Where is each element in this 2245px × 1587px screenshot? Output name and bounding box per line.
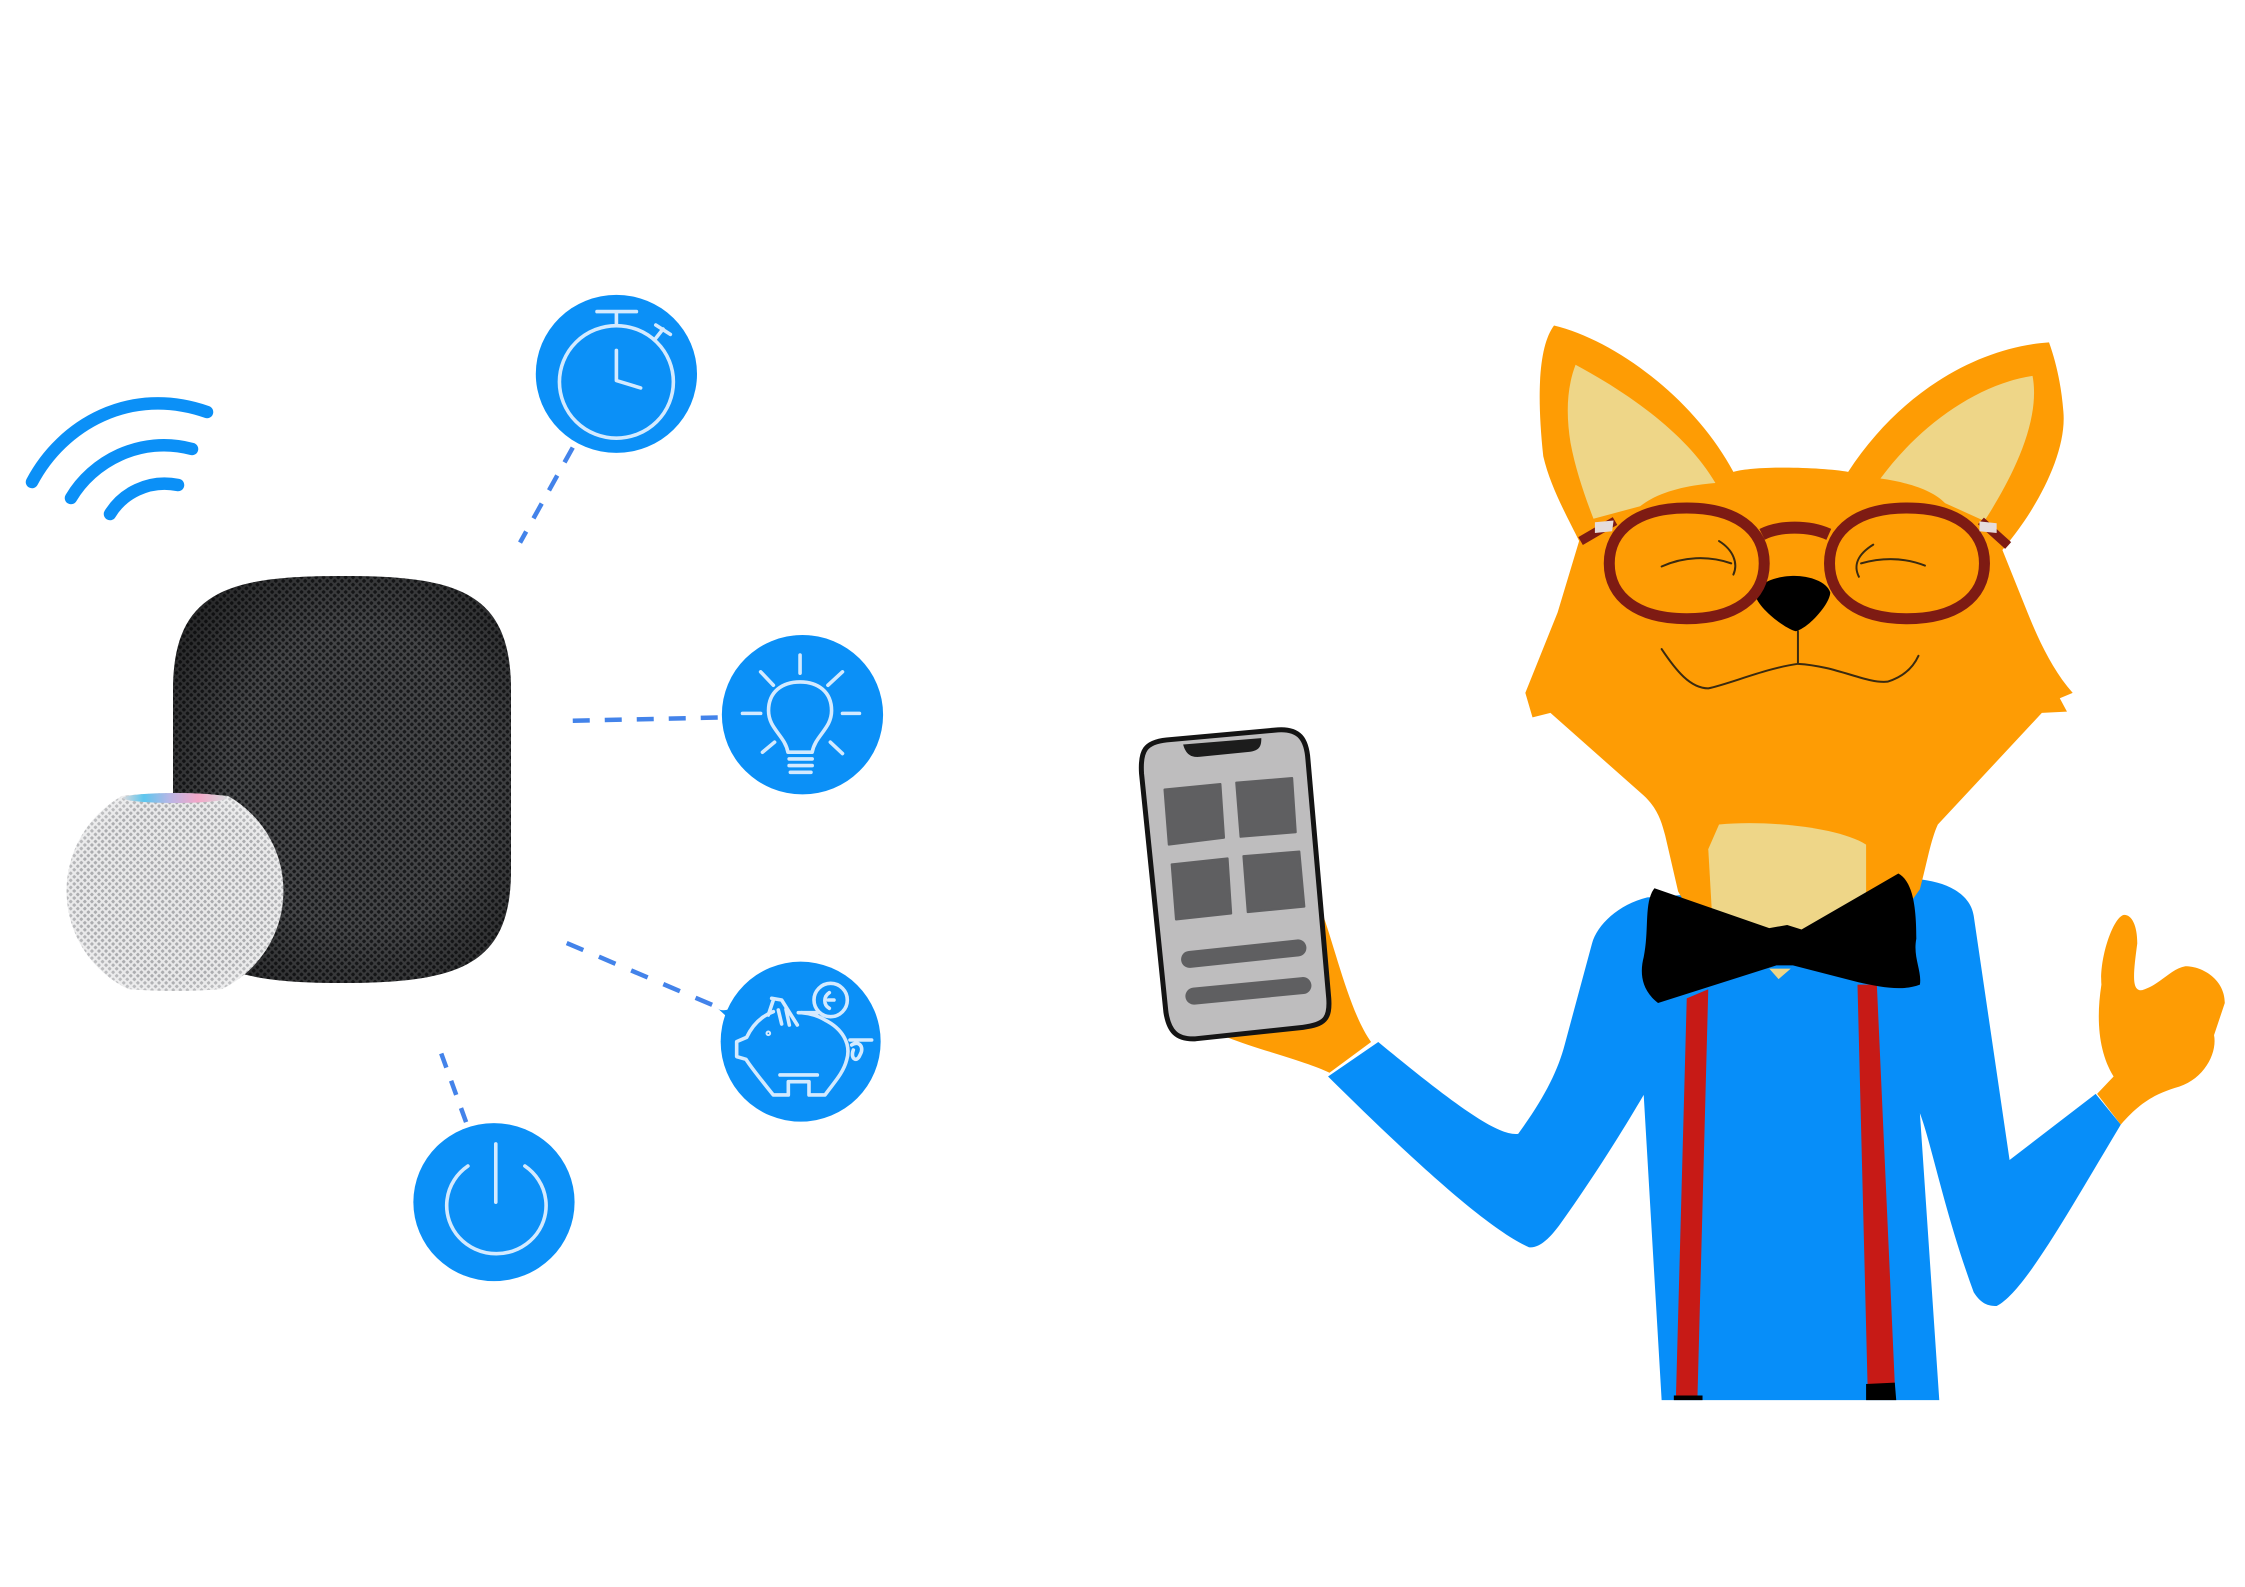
fox head and neck: [1525, 325, 2073, 936]
chest patch: [1708, 823, 1866, 936]
connector: bulb: [573, 717, 724, 721]
icon: light bulb: [722, 635, 883, 794]
icon: piggy bank: [717, 962, 881, 1122]
mouth: [1662, 631, 1918, 688]
suspenders: [1674, 985, 1896, 1400]
head silhouette with ears: [1525, 325, 2073, 918]
smartphone: [1141, 730, 1329, 1039]
icon: stopwatch: [536, 295, 697, 453]
connector: piggy bank: [567, 943, 727, 1011]
fox body and arms: [1141, 730, 2225, 1400]
icon: wifi signal: [32, 403, 207, 514]
left hand holding phone: [1228, 909, 1371, 1073]
closed eyes: [1662, 541, 1925, 577]
large dark smart speaker: [173, 576, 511, 983]
bow tie: [1642, 874, 1920, 1003]
fox mascot: [1141, 325, 2225, 1400]
glasses hinges: [1595, 521, 1997, 533]
icon: power button: [413, 1123, 575, 1281]
dashed connectors and feature icons: [413, 295, 883, 1281]
connector: power: [441, 1054, 468, 1127]
glasses: [1581, 508, 2008, 619]
connector: clock: [520, 448, 573, 543]
right hand thumbs up: [2097, 915, 2225, 1125]
small white smart speaker: [67, 793, 283, 991]
nose: [1755, 576, 1830, 631]
inner ears: [1568, 365, 2034, 521]
blue shirt: [1328, 879, 2121, 1400]
